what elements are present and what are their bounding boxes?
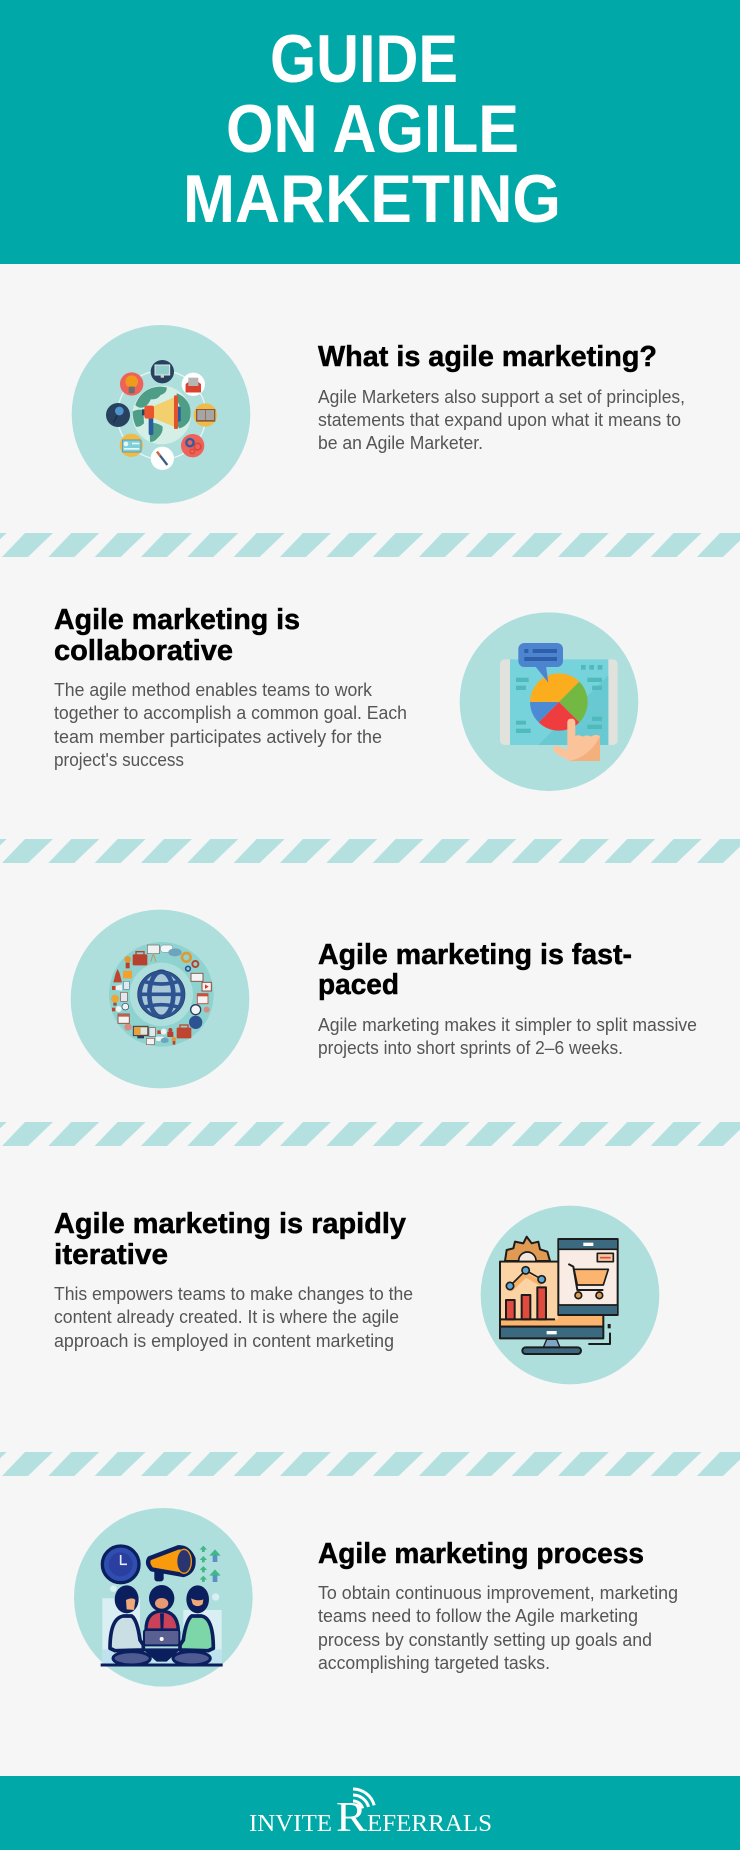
heading [318,939,632,1001]
body text: projects into short sprints of 2–6 weeks. [318,1037,623,1058]
icon: globe with ring of marketing icons [71,910,249,1088]
section 2: collaborative [54,604,638,791]
body text: teams need to follow the Agile marketing [318,1605,638,1626]
heading: Agile marketing is [54,604,300,636]
heading: What is agile marketing? [318,341,657,373]
body text [54,679,407,770]
body text: process by constantly setting up goals and [318,1629,652,1650]
heading: Agile marketing is rapidly [54,1208,406,1240]
body text: Agile marketing makes it simpler to split massive [318,1014,697,1035]
heading [54,1208,406,1271]
heading: iterative [54,1239,168,1271]
heading: Agile marketing is fast- [318,939,632,971]
body text [54,1283,413,1351]
body text: together to accomplish a common goal. Each [54,702,407,723]
section 4: rapidly iterative [54,1206,659,1384]
body text: Agile Marketers also support a set of principles, [318,386,685,407]
body text [318,1582,678,1673]
header band with title: MARKETING [183,161,561,237]
body text: The agile method enables teams to work [54,679,373,700]
body text: team member participates actively for the [54,726,382,747]
logo: InviteReferrals wordmark: EFERRALS [367,1811,492,1837]
body text: This empowers teams to make changes to the [54,1283,413,1304]
header band with title: GUIDE [270,21,458,97]
body text [318,386,685,453]
icon: globe with megaphone [72,325,250,504]
heading: collaborative [54,635,233,667]
header band with title: ON AGILE [226,91,519,167]
body text: project's success [54,749,184,770]
body text: approach is employed in content marketing [54,1330,394,1351]
logo: InviteReferrals wordmark [249,1789,492,1841]
section 1: what is agile marketing [72,325,685,504]
heading: paced [318,969,399,1001]
body text [318,1014,697,1058]
heading [54,604,300,667]
icon: tablet with pie chart [460,612,638,791]
body text: content already created. It is where the agile [54,1306,399,1327]
body text: be an Agile Marketer. [318,432,483,453]
logo: InviteReferrals wordmark: INVITE [249,1811,332,1837]
heading: Agile marketing process [318,1538,644,1570]
icon: team with laptop, clock, megaphone and arrows [74,1508,253,1687]
header band with title [0,0,740,264]
body text: To obtain continuous improvement, marketing [318,1582,678,1603]
section 3: fast-paced [71,910,697,1088]
body text: accomplishing targeted tasks. [318,1652,550,1673]
section 5: agile marketing process [74,1508,678,1687]
logo: InviteReferrals wordmark: R [336,1795,367,1841]
body text: statements that expand upon what it means to [318,409,681,430]
icon: monitor, gear and shopping cart [481,1206,659,1384]
footer band with logo [0,1776,740,1850]
